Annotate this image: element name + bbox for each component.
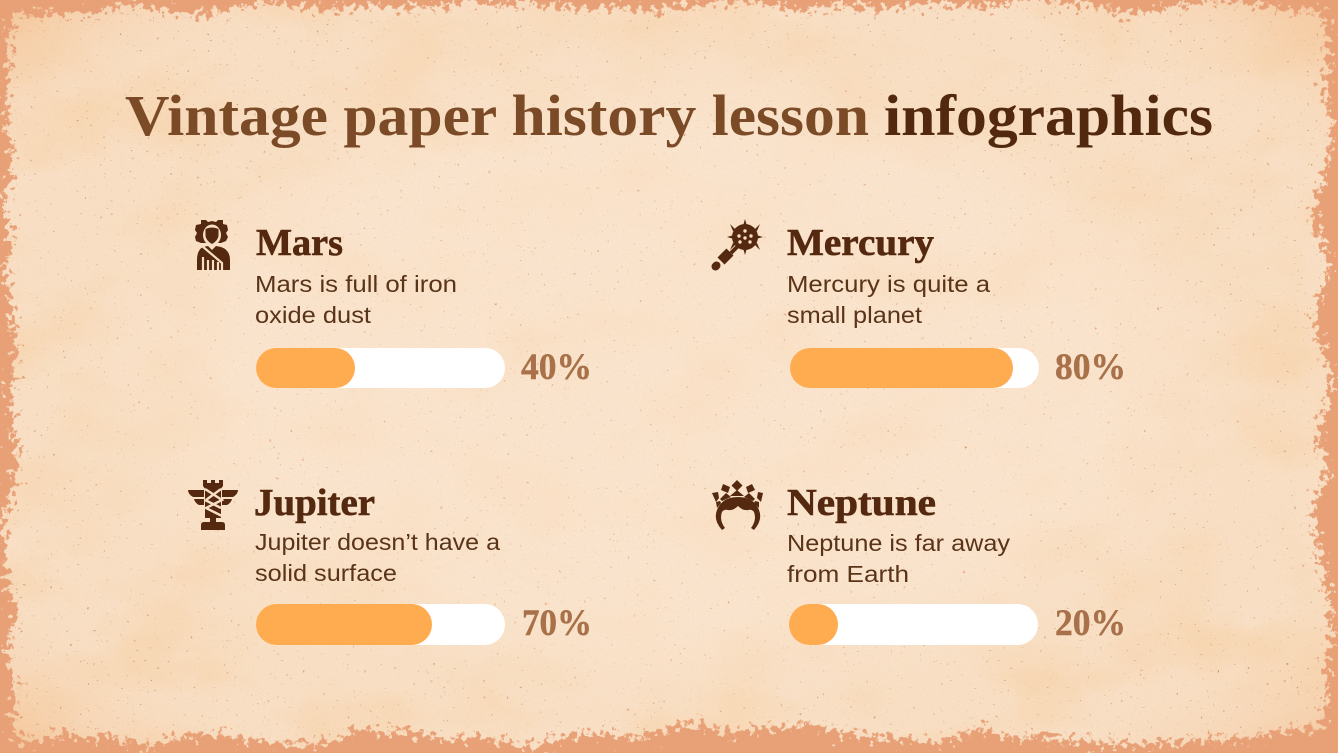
value: 20%: 20%: [1055, 603, 1126, 644]
heading: Neptune: Neptune: [787, 482, 936, 524]
progress bar: Jupiter 70%: [256, 604, 505, 645]
progress bar: Mars 40%: [256, 348, 505, 388]
description: Jupiter: solid surface: [255, 560, 397, 586]
panel: Neptune: [712, 480, 1126, 645]
progress bar: Mercury 80%: [790, 348, 1039, 388]
description: Mars: oxide dust: [255, 302, 371, 328]
title: Vintage paper history lesson: [125, 83, 869, 148]
icon: ornate crown: [712, 480, 763, 530]
icon: spiked mace: [716, 219, 763, 266]
description: Jupiter: [255, 529, 501, 586]
value: 80%: 80%: [1055, 347, 1126, 388]
panel: Jupiter: [188, 480, 592, 645]
title: [125, 83, 1213, 148]
heading: Jupiter: Jupiter: [254, 482, 375, 524]
description: Jupiter: Jupiter doesn’t have a: [255, 529, 501, 555]
description: Mercury: [787, 271, 991, 328]
heading: Mars: Mars: [256, 222, 343, 264]
icon: winged totem: [188, 480, 238, 530]
title: infographics: [884, 83, 1213, 148]
heading: Mercury: Mercury: [787, 222, 934, 264]
value: 40%: 40%: [521, 347, 592, 388]
description: Neptune: [787, 530, 1010, 587]
description: Neptune: Neptune is far away: [787, 530, 1010, 556]
icon: laurel-crowned statue: [195, 220, 230, 270]
description: Mars: [255, 271, 457, 328]
value: 70%: 70%: [522, 603, 592, 644]
panel: Mars: [195, 220, 592, 388]
progress bar: Neptune 20%: [789, 604, 1038, 645]
description: Mercury: Mercury is quite a: [787, 271, 991, 297]
panel: Mercury: [716, 219, 1126, 388]
description: Mercury: small planet: [787, 302, 922, 328]
description: Mars: Mars is full of iron: [255, 271, 457, 297]
description: Neptune: from Earth: [787, 561, 909, 587]
